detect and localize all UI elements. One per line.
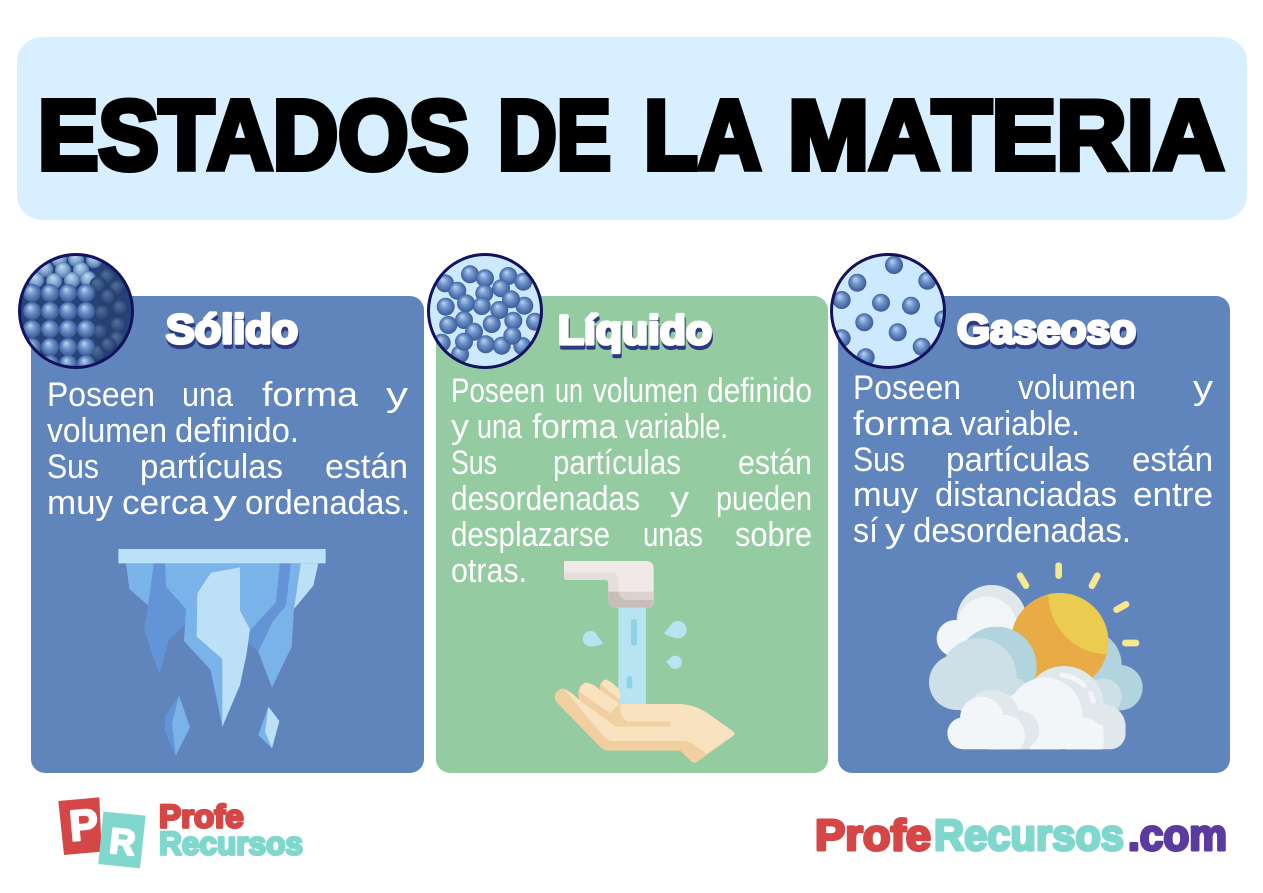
title: [38, 80, 1224, 190]
text block: gaseoso: forma: [853, 405, 952, 443]
icon: ice: [118, 549, 326, 756]
text block: solido: muy: [47, 484, 113, 522]
text block: gaseoso: Poseen: [853, 369, 961, 407]
text block: solido: Sus: [47, 448, 99, 486]
icon: sun and clouds: [929, 562, 1143, 750]
title banner: [17, 37, 1247, 220]
icon: faucet and hand: [555, 561, 734, 763]
text block: gaseoso: [853, 369, 1213, 550]
panel: solido: [31, 296, 424, 773]
logo: profe recursos: R: [107, 820, 138, 863]
text block: solido: cerca: [122, 484, 208, 522]
website address: .com: [1128, 811, 1227, 860]
text block: gaseoso: y: [885, 512, 905, 550]
heading: solido: Sólido: [166, 306, 298, 352]
logo: profe recursos: Recursos: [159, 826, 303, 862]
logo: profe recursos: Profe: [159, 798, 244, 834]
text block: gaseoso: desordenadas.: [913, 512, 1131, 550]
text block: liquido: y: [451, 408, 469, 446]
title: MATERIA: [788, 80, 1224, 190]
text block: solido: una: [182, 376, 233, 414]
text block: solido: definido.: [175, 412, 299, 450]
text block: liquido: una: [477, 408, 522, 446]
text block: liquido: volumen: [593, 372, 698, 410]
text block: gaseoso: partículas: [946, 441, 1090, 479]
text block: liquido: Poseen: [451, 372, 545, 410]
text block: solido: y: [213, 484, 237, 522]
text block: liquido: y: [670, 480, 689, 518]
text block: liquido: variable.: [625, 408, 728, 446]
heading: gaseoso: Gaseoso: [957, 306, 1136, 352]
text block: gaseoso: y: [1193, 369, 1213, 407]
icon: liquid particles: [428, 254, 544, 368]
text block: solido: ordenadas.: [245, 484, 410, 522]
text block: liquido: sobre: [735, 516, 812, 554]
panel: gaseoso: [838, 296, 1230, 773]
text block: solido: forma: [262, 376, 358, 414]
logo: profe recursos: [58, 797, 303, 868]
website address: Profe: [815, 811, 931, 860]
text block: liquido: partículas: [553, 444, 681, 482]
text block: liquido: forma: [532, 408, 617, 446]
text block: solido: están: [325, 448, 408, 486]
text block: liquido: desordenadas: [451, 480, 640, 518]
text block: solido: [47, 376, 410, 522]
text block: liquido: otras.: [451, 552, 527, 590]
text block: solido: Poseen: [47, 376, 155, 414]
text block: liquido: [451, 372, 812, 590]
icon: gas particles: [831, 254, 952, 368]
text block: gaseoso: están: [1132, 441, 1213, 479]
title: DE: [498, 80, 611, 190]
title: ESTADOS: [38, 80, 469, 190]
text block: liquido: unas: [643, 516, 703, 554]
text block: liquido: pueden: [716, 480, 812, 518]
text block: gaseoso: variable.: [960, 405, 1080, 443]
logo: profe recursos: P: [67, 801, 100, 851]
text block: gaseoso: entre: [1133, 476, 1213, 514]
panel: liquido: [436, 296, 828, 773]
text block: gaseoso: Sus: [853, 441, 905, 479]
text block: gaseoso: muy: [853, 476, 918, 514]
text block: solido: volumen: [47, 412, 167, 450]
text block: solido: y: [386, 376, 408, 414]
text block: gaseoso: distanciadas: [935, 476, 1117, 514]
heading: liquido: Líquido: [558, 307, 712, 353]
text block: liquido: están: [738, 444, 812, 482]
text block: liquido: definido: [707, 372, 812, 410]
text block: liquido: Sus: [451, 444, 497, 482]
website address: [815, 811, 1227, 860]
website address: Recursos: [934, 811, 1124, 860]
text block: gaseoso: volumen: [1018, 369, 1136, 407]
icon: solid particles: [19, 251, 133, 373]
text block: liquido: desplazarse: [451, 516, 610, 554]
text block: liquido: un: [555, 372, 583, 410]
text block: gaseoso: sí: [853, 512, 879, 550]
text block: solido: partículas: [140, 448, 283, 486]
title: LA: [644, 80, 761, 190]
